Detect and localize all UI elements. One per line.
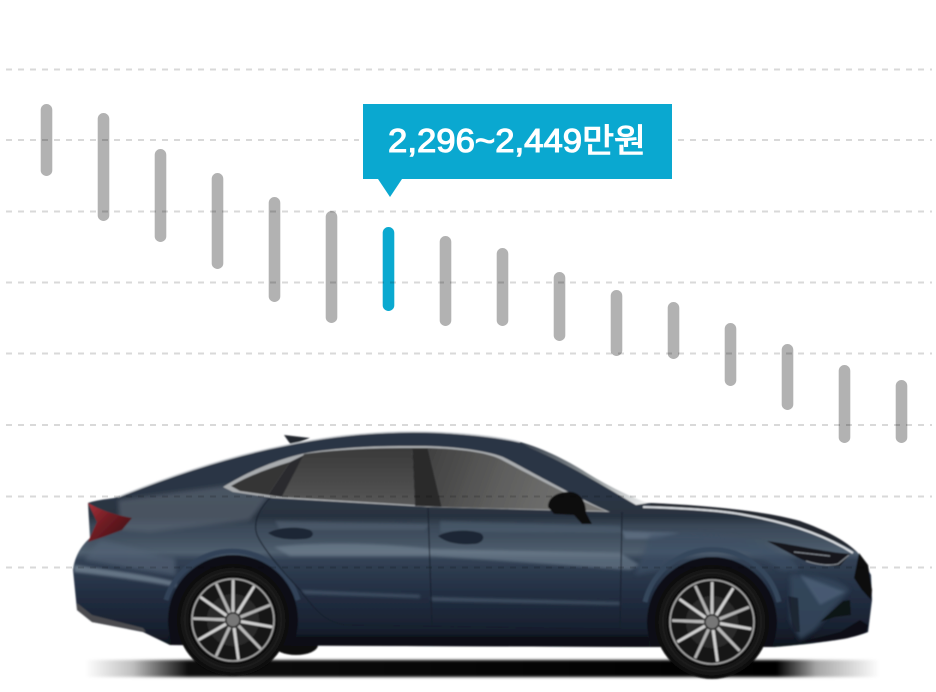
highlighted range bar (383, 227, 394, 311)
front hub (705, 615, 719, 629)
rear rim (192, 579, 274, 661)
front spokes (672, 582, 752, 662)
front door handle (438, 531, 483, 544)
callout pointer (378, 179, 402, 197)
callout fill (363, 104, 672, 179)
front rim (670, 580, 754, 664)
price callout (359, 100, 676, 197)
headlamp strip (794, 552, 849, 565)
ground shadow (85, 660, 880, 677)
car (73, 432, 880, 687)
wing mirror (548, 492, 592, 524)
front wheel (655, 565, 769, 679)
hood highlight (643, 507, 853, 553)
rear door pillar (268, 455, 304, 497)
hood dark band (650, 503, 858, 553)
rear quarter glass (231, 462, 290, 495)
grille (854, 553, 872, 600)
roof antenna (284, 435, 310, 445)
front door glass (428, 448, 606, 511)
fender vent (788, 596, 800, 632)
rear tyre (177, 564, 289, 676)
rear door glass (282, 448, 415, 505)
roof highlight (118, 432, 520, 497)
windshield (520, 442, 648, 505)
range bars (41, 104, 907, 443)
body shading (72, 484, 849, 648)
front splitter (800, 620, 868, 642)
car body (73, 432, 872, 647)
rear wheel (177, 564, 289, 676)
rear lamp (88, 503, 132, 542)
rear spokes (193, 580, 273, 660)
price text: 2,296~2,449만원 (388, 122, 646, 159)
front bumper intake (820, 600, 851, 622)
callout gap (359, 100, 676, 179)
rear wheel well (168, 554, 298, 646)
front tyre (655, 565, 769, 679)
door seams (256, 498, 622, 629)
front wheel well (646, 556, 778, 648)
B pillar (412, 448, 442, 507)
lower rocker dark band (170, 636, 650, 647)
rear hub (226, 613, 240, 627)
front arch highlight (645, 549, 779, 602)
rear window frame (223, 446, 610, 512)
front rim inner (686, 596, 738, 648)
rear lower trim (77, 603, 146, 632)
rear rim inner (207, 594, 259, 646)
rear door handle (268, 528, 313, 539)
inner rear tyre (274, 635, 318, 655)
headlamp (767, 541, 850, 566)
rear arch highlight (166, 551, 298, 600)
